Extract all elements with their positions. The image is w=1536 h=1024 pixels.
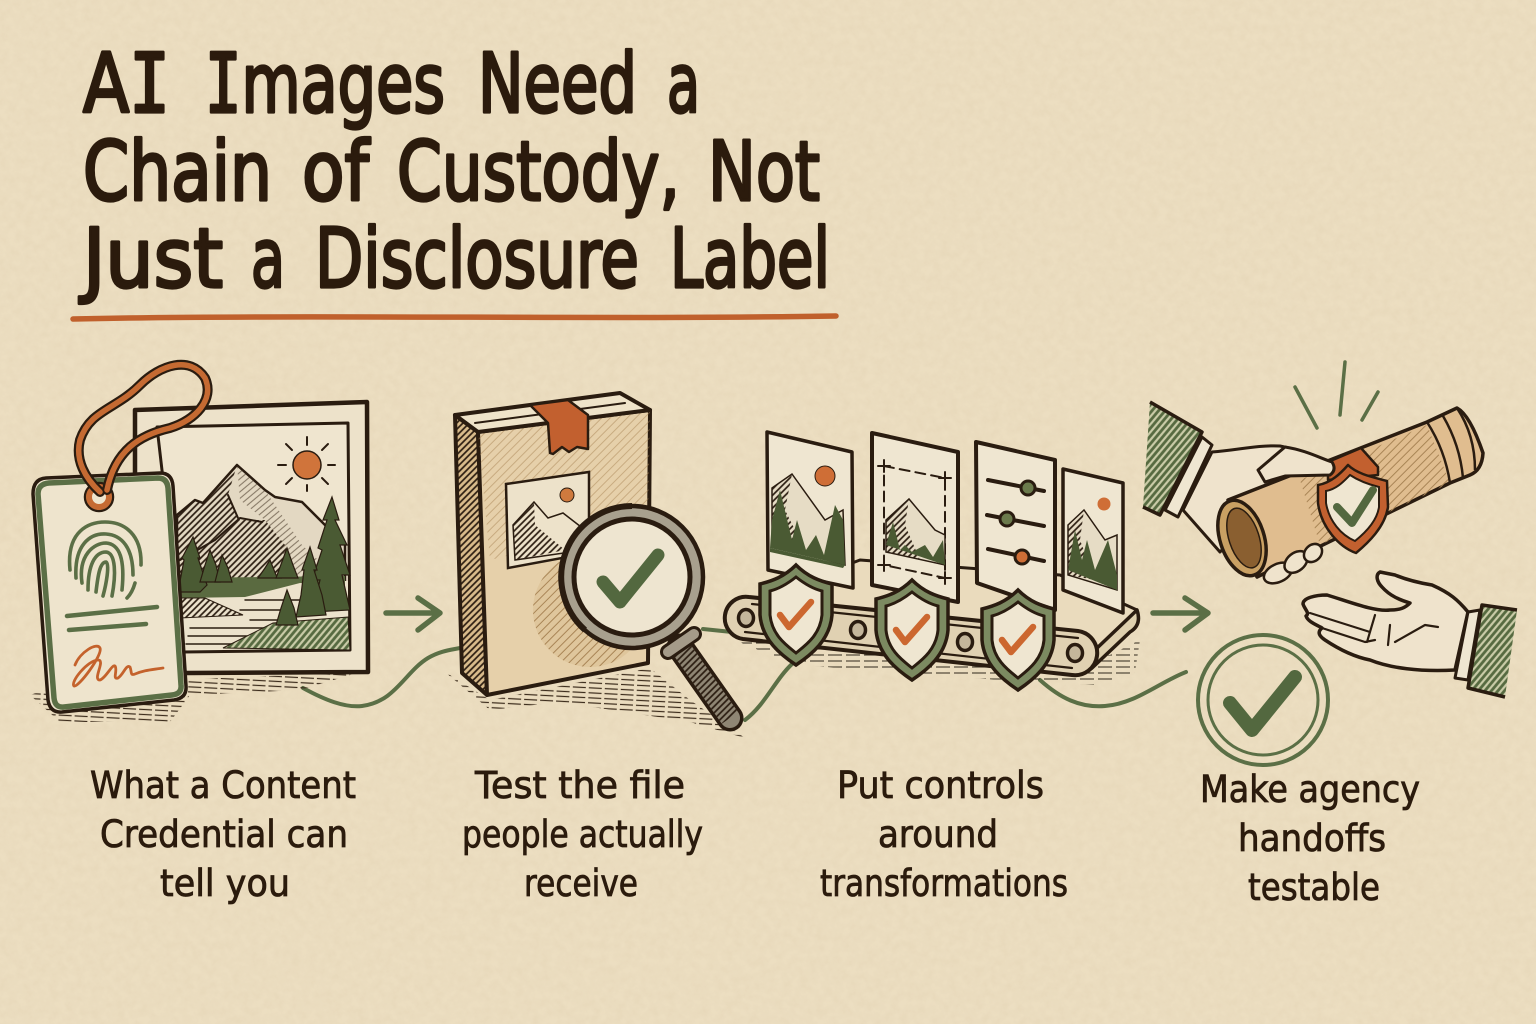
ground	[223, 617, 350, 650]
caption 1: tell you	[160, 862, 290, 905]
title underline	[73, 316, 836, 319]
card 2: crop	[872, 433, 958, 602]
title: Label	[670, 212, 830, 307]
title: a	[667, 37, 700, 132]
credential tag	[33, 473, 186, 712]
step 1: photo frame and credential tag	[30, 365, 368, 722]
step 3: conveyor with image cards and shields	[725, 432, 1140, 690]
card 4: final image	[1063, 469, 1123, 613]
title: Disclosure	[315, 212, 639, 307]
card 3: sliders	[976, 442, 1055, 610]
caption 3: transformations	[820, 862, 1068, 905]
title: Custody,	[397, 125, 680, 220]
rolled scroll	[1209, 408, 1483, 587]
caption 4: handoffs	[1238, 817, 1386, 860]
framed landscape photo	[135, 402, 368, 673]
connector curve 1	[303, 648, 460, 706]
thumb over scroll	[1258, 447, 1334, 482]
title: Chain	[83, 125, 272, 220]
tape	[530, 400, 588, 454]
mountains	[177, 465, 345, 585]
shadow under frame and tag	[30, 672, 360, 722]
lake	[178, 576, 348, 649]
title: Just	[78, 212, 223, 307]
title: Not	[708, 125, 820, 220]
caption 2: people actually	[462, 813, 703, 856]
title: Need	[478, 37, 637, 132]
title: AI	[83, 37, 170, 132]
text lines	[67, 607, 157, 630]
caption 4	[1200, 768, 1420, 909]
caption 3: around	[878, 813, 998, 856]
arrow 2	[1153, 598, 1208, 630]
pine trees	[178, 497, 350, 625]
fingerprint	[70, 522, 141, 598]
signature	[73, 646, 163, 686]
title: Images	[205, 37, 445, 132]
shadow	[445, 668, 745, 738]
string loop	[79, 365, 208, 492]
caption 2: receive	[524, 862, 638, 905]
pale circle on box	[533, 553, 647, 667]
caption 1	[90, 764, 356, 905]
magnifier	[561, 506, 730, 718]
caption 2: Test the file	[474, 764, 685, 807]
caption 4: Make agency	[1200, 768, 1420, 811]
shield 2	[876, 580, 948, 680]
caption 2	[462, 764, 703, 905]
approval check badge	[1198, 635, 1328, 765]
sun	[278, 437, 335, 491]
connector curve 2	[703, 629, 792, 720]
title: a	[251, 212, 285, 307]
shield 3	[982, 590, 1054, 690]
handing hand with sleeve	[1143, 402, 1334, 552]
step 4: agency handoff	[1143, 362, 1517, 765]
card 1: landscape	[767, 432, 853, 588]
parcel box	[455, 393, 650, 695]
shield 1	[760, 565, 832, 665]
check mark	[603, 555, 658, 602]
eyelet	[85, 483, 113, 511]
caption 1: Credential can	[100, 813, 348, 856]
receiving hand with sleeve	[1303, 572, 1517, 697]
title	[78, 37, 830, 307]
shadow	[730, 635, 1140, 685]
title: of	[302, 125, 371, 220]
scroll seal shield	[1318, 448, 1388, 553]
connector curve 3	[1040, 672, 1186, 706]
caption 4: testable	[1248, 866, 1380, 909]
rollers	[738, 610, 1082, 662]
step 2: parcel and magnifier	[445, 393, 745, 738]
emphasis sparks	[1295, 362, 1378, 428]
caption 3	[820, 764, 1068, 905]
fingers under scroll	[1261, 540, 1326, 587]
caption 3: Put controls	[837, 764, 1044, 807]
caption 1: What a Content	[90, 764, 356, 807]
conveyor belt	[725, 560, 1138, 675]
box photo	[506, 472, 589, 568]
arrow 1	[386, 598, 440, 630]
